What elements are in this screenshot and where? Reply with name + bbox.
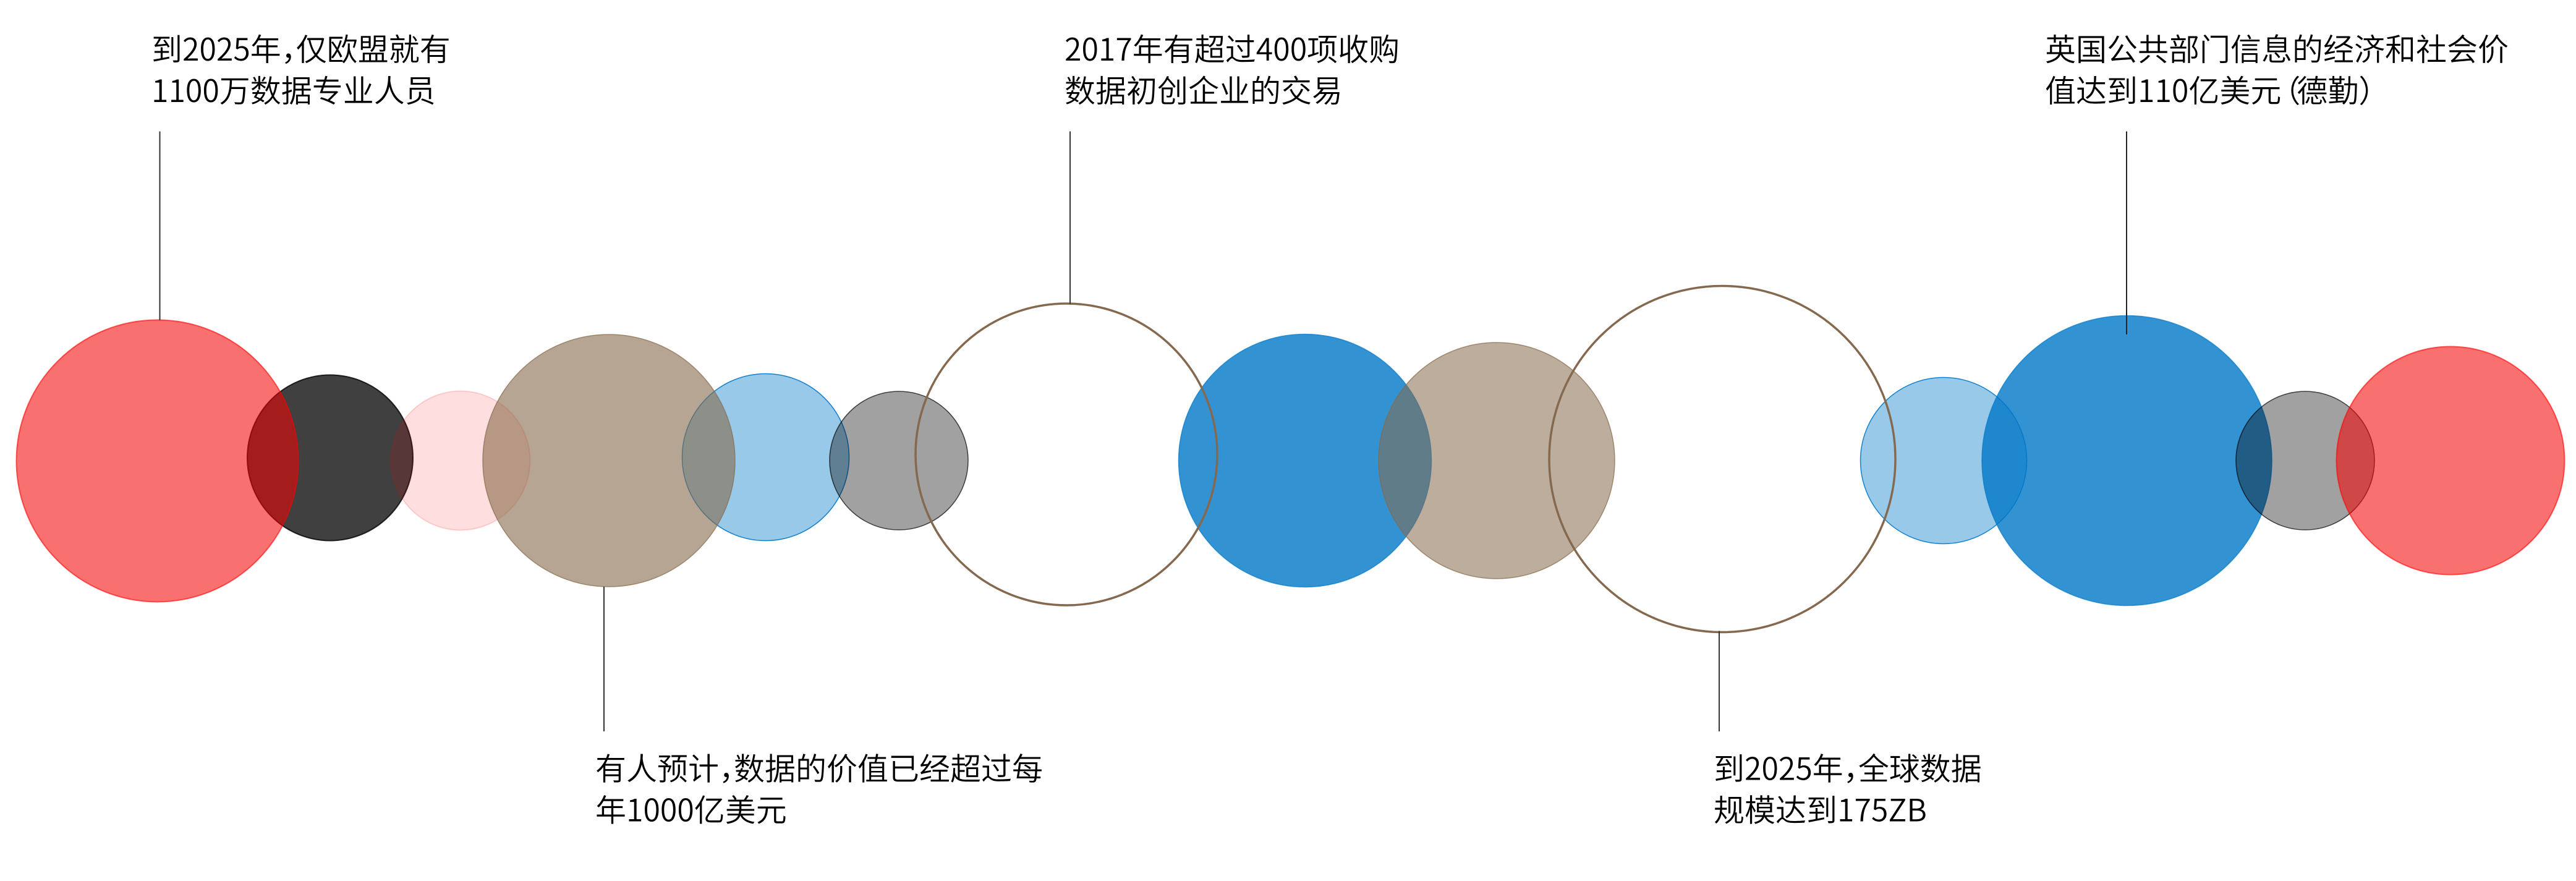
circle: solid blue large [1982,315,2272,606]
leader line 5 [2126,131,2127,334]
circle: dark grey 1 [247,375,413,540]
circle: hollow outline 2 [1549,286,1895,632]
circle: red large left [16,320,298,602]
leader line 2 [603,587,605,731]
circle: grey 1 [830,391,968,530]
callout: acquisitions 2017: 2017年有超过400项收购 [1065,25,1400,70]
callout: global datasphere: 到2025年，全球数据 [1714,744,1982,789]
circle: tan 1 [483,334,735,587]
callout: EU data professionals [151,25,451,111]
circle: solid blue 1 [1178,334,1432,587]
circle: red right [2337,346,2564,575]
callout: UK public sector information [2045,25,2509,111]
callout: value of data: 有人预计，数据的价值已经超过每 [595,744,1043,789]
circle: hollow outline 1 [916,304,1217,605]
callout: UK public sector information: 值达到110亿美元（德勤） [2045,67,2389,111]
circle: light blue 2 [1861,377,2026,544]
leader line 4 [1719,631,1720,731]
callout: UK public sector information: 英国公共部门信息的经济和社会价 [2045,25,2509,70]
callout: acquisitions 2017: 数据初创企业的交易 [1065,67,1343,111]
circle: grey 2 [2236,391,2374,530]
circle: pale pink [391,391,530,530]
callout: EU data professionals: 到2025年，仅欧盟就有 [151,25,451,70]
callout: value of data [595,744,1043,831]
callout: global datasphere [1714,744,1982,831]
callout: EU data professionals: 1100万数据专业人员 [151,67,436,111]
callout: acquisitions 2017 [1065,25,1400,111]
circle: tan 2 [1379,343,1615,579]
callout: global datasphere: 规模达到175ZB [1714,786,1927,831]
leader line 1 [159,131,161,320]
leader line 3 [1069,131,1071,304]
circle: light blue 1 [682,373,849,540]
callout: value of data: 年1000亿美元 [595,786,787,831]
